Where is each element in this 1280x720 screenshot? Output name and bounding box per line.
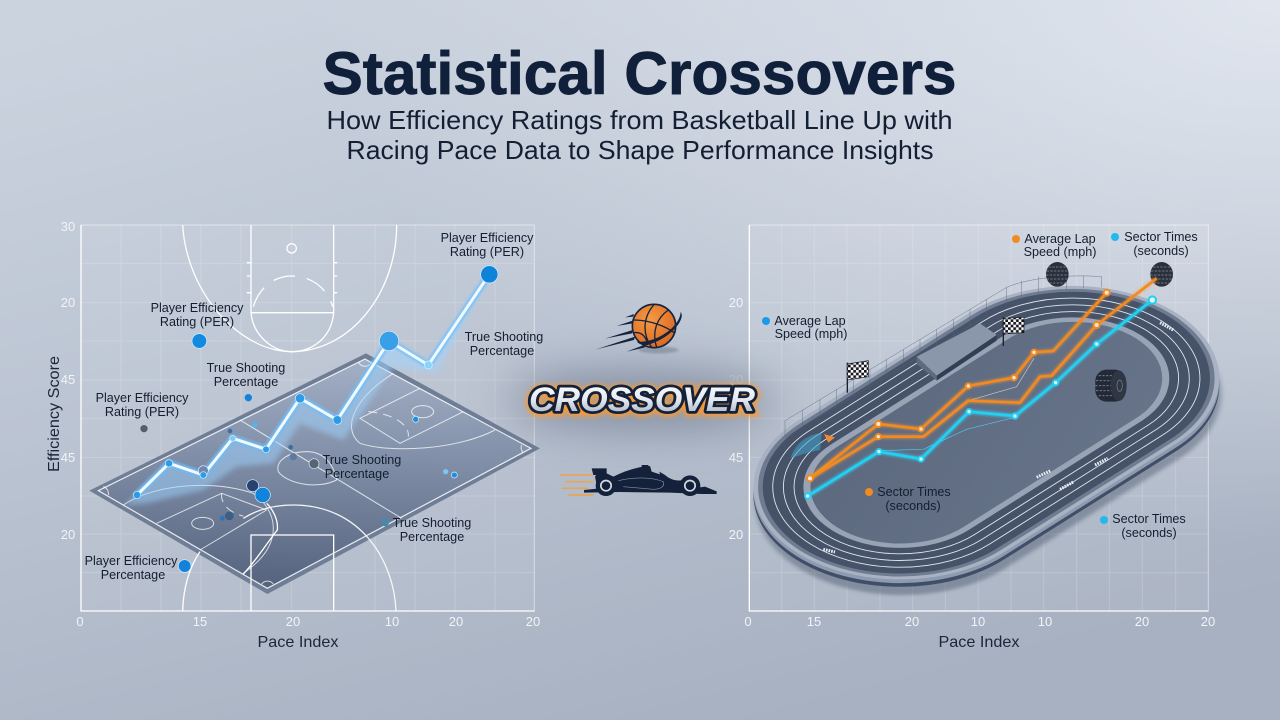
left chart annotations: Percentage [470,344,534,358]
tire: infield [1095,370,1127,402]
right chart annotations: Average Lap [774,314,846,328]
subtitle: Racing Pace Data to Shape Performance Insights [346,135,934,165]
left x axis title: Pace Index [258,634,338,651]
checkered flag: left [847,361,868,393]
grandstand [917,323,997,381]
right axis tick labels: 45 [729,450,743,465]
left axis tick labels: 20 [526,614,540,629]
line: orange series A [810,293,1107,478]
right chart annotations [762,230,1198,540]
line: orange series B [810,278,1157,478]
left chart annotations: Player Efficiency [151,301,244,315]
right chart annotations: (seconds) [1133,244,1189,258]
left chart annotations: Rating (PER) [160,315,234,329]
crossover wordmark: CROSSOVER [529,381,755,419]
right chart annotations: Sector Times [1124,230,1198,244]
right axis tick labels: 10 [971,614,985,629]
right axis tick labels: 20 [1201,614,1215,629]
left axis tick labels [61,219,540,629]
right chart annotations: Sector Times [877,485,951,499]
right axis tick labels [729,295,1215,629]
right axis tick labels: 20 [1135,614,1149,629]
right axis tick labels: 20 [729,527,743,542]
right chart annotations: (seconds) [1121,526,1177,540]
data points [133,266,498,572]
left axis tick labels: 30 [61,219,75,234]
right axis tick labels: 20 [729,295,743,310]
isometric court [89,353,540,594]
left axis tick labels: 10 [385,614,399,629]
left axis tick labels: 20 [449,614,463,629]
icon: race car [560,465,717,496]
right axis tick labels: 15 [807,614,821,629]
checkered flag: right [1003,317,1024,346]
tire: top right [1150,262,1173,287]
left chart annotations: True Shooting [207,361,285,375]
cyan markers [805,296,1156,499]
right chart annotations: Speed (mph) [775,327,847,341]
left chart annotations: Percentage [400,530,464,544]
right x axis title: Pace Index [938,634,1020,651]
right axis tick labels: 10 [1038,614,1052,629]
right axis tick labels: 20 [729,372,743,387]
left axis tick labels: 20 [61,295,75,310]
left axis tick labels: 20 [61,527,75,542]
left axis tick labels: 45 [61,450,75,465]
efficiency line [137,274,489,495]
left axis tick labels: 20 [286,614,300,629]
orange markers [807,290,1110,481]
guard rail [785,275,1102,437]
right chart annotations: Speed (mph) [1024,245,1096,259]
panel: basketball efficiency chart [46,219,543,651]
left y axis title: Efficiency Score [46,356,63,472]
centre crossover emblem [507,304,777,496]
right axis tick labels: 0 [744,614,752,629]
left chart annotations: Percentage [214,375,278,389]
glow area under line [125,274,489,505]
left chart annotations: True Shooting [393,516,471,530]
lower court markings [183,503,396,611]
left chart annotations: Player Efficiency [441,231,534,245]
right chart annotations: Sector Times [1112,512,1186,526]
panel: racing pace chart [693,225,1280,651]
right chart annotations: Average Lap [1024,232,1096,246]
right chart annotations: (seconds) [885,499,941,513]
left chart annotations: True Shooting [323,453,401,467]
left chart annotations [85,231,543,582]
subtitle [326,105,952,165]
title: Statistical Crossovers [322,40,956,107]
left chart annotations: Percentage [325,467,389,481]
left chart annotations: Rating (PER) [450,245,524,259]
line: cyan series [808,300,1152,496]
left axis tick labels: 15 [193,614,207,629]
crossover glow: CROSSOVER [529,382,755,420]
left chart annotations: Percentage [101,568,165,582]
left chart annotations: Rating (PER) [105,405,179,419]
tire: top centre [1046,262,1069,287]
right axis tick labels: 20 [905,614,919,629]
upper court markings [183,225,397,352]
left chart annotations: True Shooting [465,330,543,344]
left chart annotations: Player Efficiency [85,554,178,568]
subtitle: How Efficiency Ratings from Basketball Line Up with [326,105,952,135]
left axis tick labels: 0 [76,614,84,629]
left chart annotations: Player Efficiency [96,391,189,405]
oval race track [693,248,1280,633]
icon: basketball [596,304,682,353]
thin secondary lines [879,358,1034,451]
left axis tick labels: 45 [61,372,75,387]
